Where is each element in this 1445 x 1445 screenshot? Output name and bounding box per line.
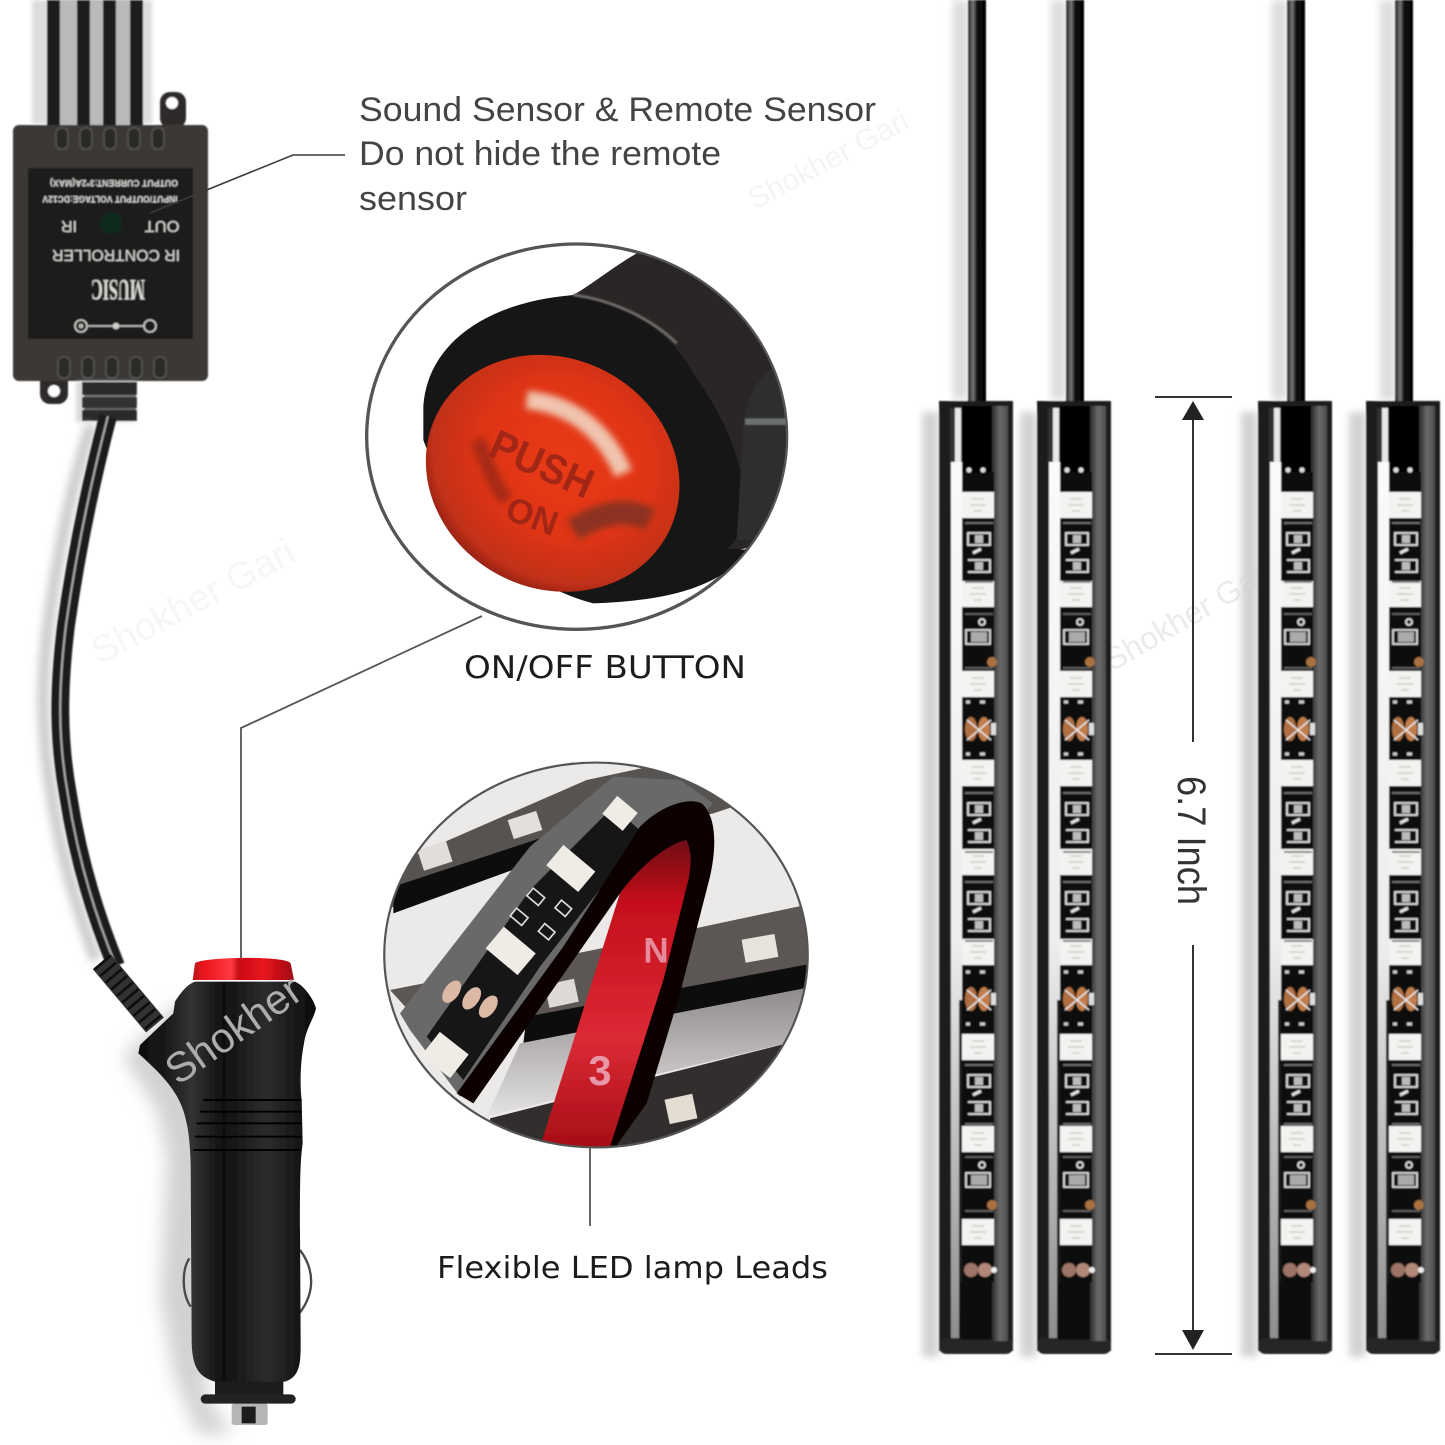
dimension label: 6.7 Inch	[1169, 776, 1213, 905]
mid strip black band	[523, 963, 813, 1043]
rear strip led	[508, 811, 542, 839]
connector slots	[56, 128, 166, 378]
side spring clips	[184, 1250, 311, 1313]
plug tip highlight	[242, 1407, 256, 1423]
output wires	[32, 0, 152, 126]
strip photo	[380, 760, 813, 1160]
sensor caption	[359, 91, 876, 218]
LED strip 1	[922, 0, 1013, 1357]
backing letter N: N	[643, 932, 669, 971]
mid strip led	[742, 934, 778, 963]
LED strip 2	[1020, 0, 1111, 1357]
callout line: flexible leads	[589, 1148, 591, 1226]
housing outer	[573, 253, 793, 550]
sensor caption: Do not hide the remote	[359, 135, 721, 173]
red dome	[426, 354, 680, 592]
dimension arrow	[1155, 397, 1232, 1354]
polarity symbol	[75, 320, 156, 332]
rear strip top	[392, 768, 730, 908]
lower strip led	[665, 1094, 697, 1124]
dome left shade	[477, 440, 507, 500]
IR sensor dot	[100, 212, 122, 234]
clear arch strip	[400, 777, 713, 1097]
label text, printed upside down	[42, 178, 180, 306]
arch pads	[442, 980, 498, 1018]
callout line: sensor	[150, 155, 345, 213]
cigarette lighter plug	[102, 958, 316, 1433]
plug tip	[232, 1403, 268, 1425]
rear strip black band	[393, 838, 540, 913]
LED strip 3	[1241, 0, 1332, 1357]
rear strip led two	[417, 841, 453, 871]
cable	[43, 416, 116, 966]
ON/OFF BUTTON caption: ON/OFF BUTTON	[464, 650, 746, 686]
dome shade	[573, 513, 650, 530]
black back of arch	[457, 801, 714, 1150]
ON embossed: ON	[501, 489, 563, 544]
plug body	[138, 982, 316, 1382]
panel: push button close-up	[367, 244, 793, 636]
dome highlight	[527, 400, 623, 473]
label text, printed upside down: IR	[61, 217, 77, 234]
white gaps	[385, 764, 804, 1120]
mounting tab bottom	[40, 372, 68, 404]
mid strip upper	[390, 906, 807, 1016]
arch pcb	[427, 807, 643, 1080]
PUSH embossed: PUSH	[483, 420, 601, 507]
panel: IR controller box with wires	[13, 0, 208, 422]
cable grip	[102, 962, 155, 1025]
Flexible LED caption: Flexible LED lamp Leads	[437, 1251, 828, 1286]
plug shadow	[123, 1007, 233, 1433]
sensor caption: Sound Sensor & Remote Sensor	[359, 91, 876, 129]
arch leds	[421, 796, 638, 1078]
LED strip 4	[1349, 0, 1440, 1357]
callout line: on/off button	[241, 616, 482, 960]
mounting tab top	[160, 92, 186, 128]
label text, printed upside down: INPUT/OUTPUT VOLTAGE:DC12V	[42, 194, 178, 204]
front lower strip	[490, 1044, 782, 1146]
label text, printed upside down: IR CONTROLLER	[52, 246, 180, 263]
strip ring	[385, 763, 807, 1147]
plug collar	[201, 1380, 296, 1404]
arch small parts	[510, 888, 572, 940]
sensor caption: sensor	[359, 180, 467, 218]
watermark faint: Shokher Gari	[85, 531, 302, 673]
light shade under mid strip	[487, 987, 813, 1117]
mid strip led two	[545, 979, 579, 1008]
watermark faint upper: Shokher Gari	[743, 104, 914, 216]
panel: flexible strip close-up	[380, 760, 813, 1160]
label text, printed upside down: OUTPUT CURRENT:3*2A(MAX)	[50, 178, 178, 188]
watermark on plug: Shokher	[156, 966, 310, 1093]
cable strain relief	[76, 382, 137, 422]
plug ridges	[193, 1100, 302, 1150]
housing	[423, 295, 750, 603]
controller case	[13, 125, 208, 381]
label text, printed upside down: OUT	[144, 217, 180, 234]
button ring	[367, 244, 787, 629]
watermark on strips: Shokher Gari	[1098, 553, 1279, 678]
red button cap	[193, 958, 294, 980]
side highlight	[745, 418, 788, 425]
button photo	[423, 253, 786, 604]
label text, printed upside down: MUSIC	[91, 273, 145, 306]
backing number 3: 3	[588, 1047, 612, 1094]
housing side	[737, 474, 744, 536]
red adhesive backing	[540, 840, 691, 1147]
label panel	[28, 168, 193, 339]
housing highlight	[573, 295, 677, 343]
